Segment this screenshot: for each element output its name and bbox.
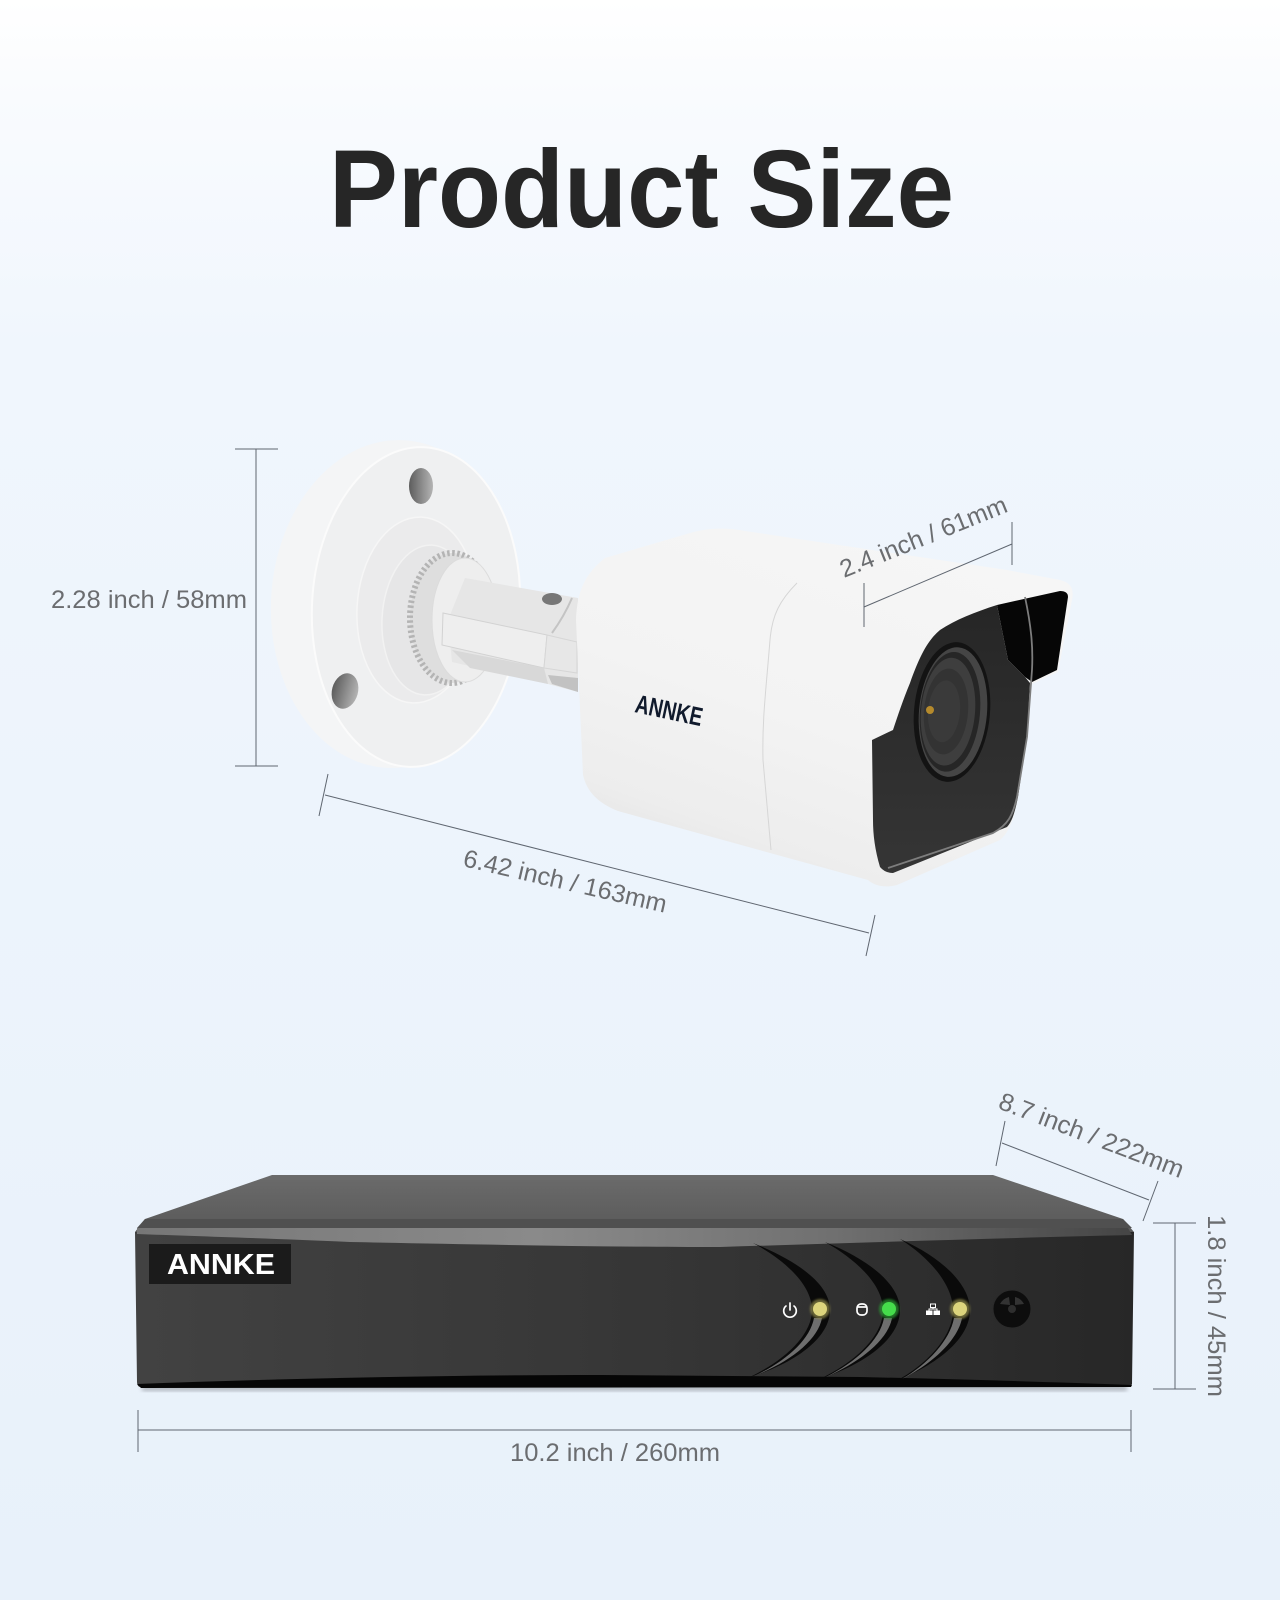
icon: network <box>926 1304 940 1314</box>
camera mounting flange <box>263 434 528 774</box>
recorder logo plate <box>149 1244 291 1284</box>
recorder bottom edge <box>137 1375 1132 1388</box>
dimension: camera width <box>836 491 1012 627</box>
recorder front panel <box>135 1232 1134 1387</box>
dimension: camera length: 6.42 inch / 163mm <box>461 845 670 919</box>
LED: network <box>950 1299 970 1319</box>
lens LED spot <box>926 706 934 714</box>
IR receiver button <box>993 1290 1031 1328</box>
recorder shadow <box>142 1384 1127 1391</box>
illustration: bullet camera <box>263 434 1073 886</box>
camera hood <box>997 591 1068 682</box>
dimension: recorder height: 1.8 inch / 45mm <box>1202 1215 1230 1397</box>
camera front face <box>872 605 1030 873</box>
recorder light strip <box>137 1228 1132 1247</box>
face glass reflection <box>888 597 1032 868</box>
dimension: camera length <box>319 774 875 956</box>
LED: disk <box>879 1299 899 1319</box>
icon: power <box>784 1303 796 1317</box>
dimension: recorder depth: 8.7 inch / 222mm <box>995 1087 1188 1184</box>
status crescent: network <box>898 1239 970 1380</box>
dimension: recorder width: 10.2 inch / 260mm <box>510 1439 720 1467</box>
dimension: camera width: 2.4 inch / 61mm <box>836 491 1011 584</box>
status crescent: disk <box>822 1242 900 1378</box>
recorder top surface <box>135 1175 1134 1232</box>
dimension: recorder height <box>1153 1215 1230 1397</box>
camera arm <box>442 578 578 692</box>
camera logo: ANNKE <box>633 689 706 732</box>
title: Product Size <box>329 128 954 251</box>
dimension: camera height <box>51 449 278 766</box>
icon: disk <box>857 1304 867 1315</box>
dimension: recorder width <box>138 1410 1131 1467</box>
body seam <box>763 583 797 850</box>
illustration: DVR recorder <box>135 1175 1134 1391</box>
dimension: camera height: 2.28 inch / 58mm <box>51 586 247 614</box>
recorder logo plate: ANNKE <box>167 1249 275 1281</box>
camera lens <box>908 639 996 785</box>
dimension: recorder depth <box>995 1087 1188 1221</box>
LED: power <box>810 1299 830 1319</box>
camera body <box>576 529 1073 886</box>
recorder bevel band <box>137 1219 1132 1228</box>
status crescent: power <box>750 1243 830 1377</box>
